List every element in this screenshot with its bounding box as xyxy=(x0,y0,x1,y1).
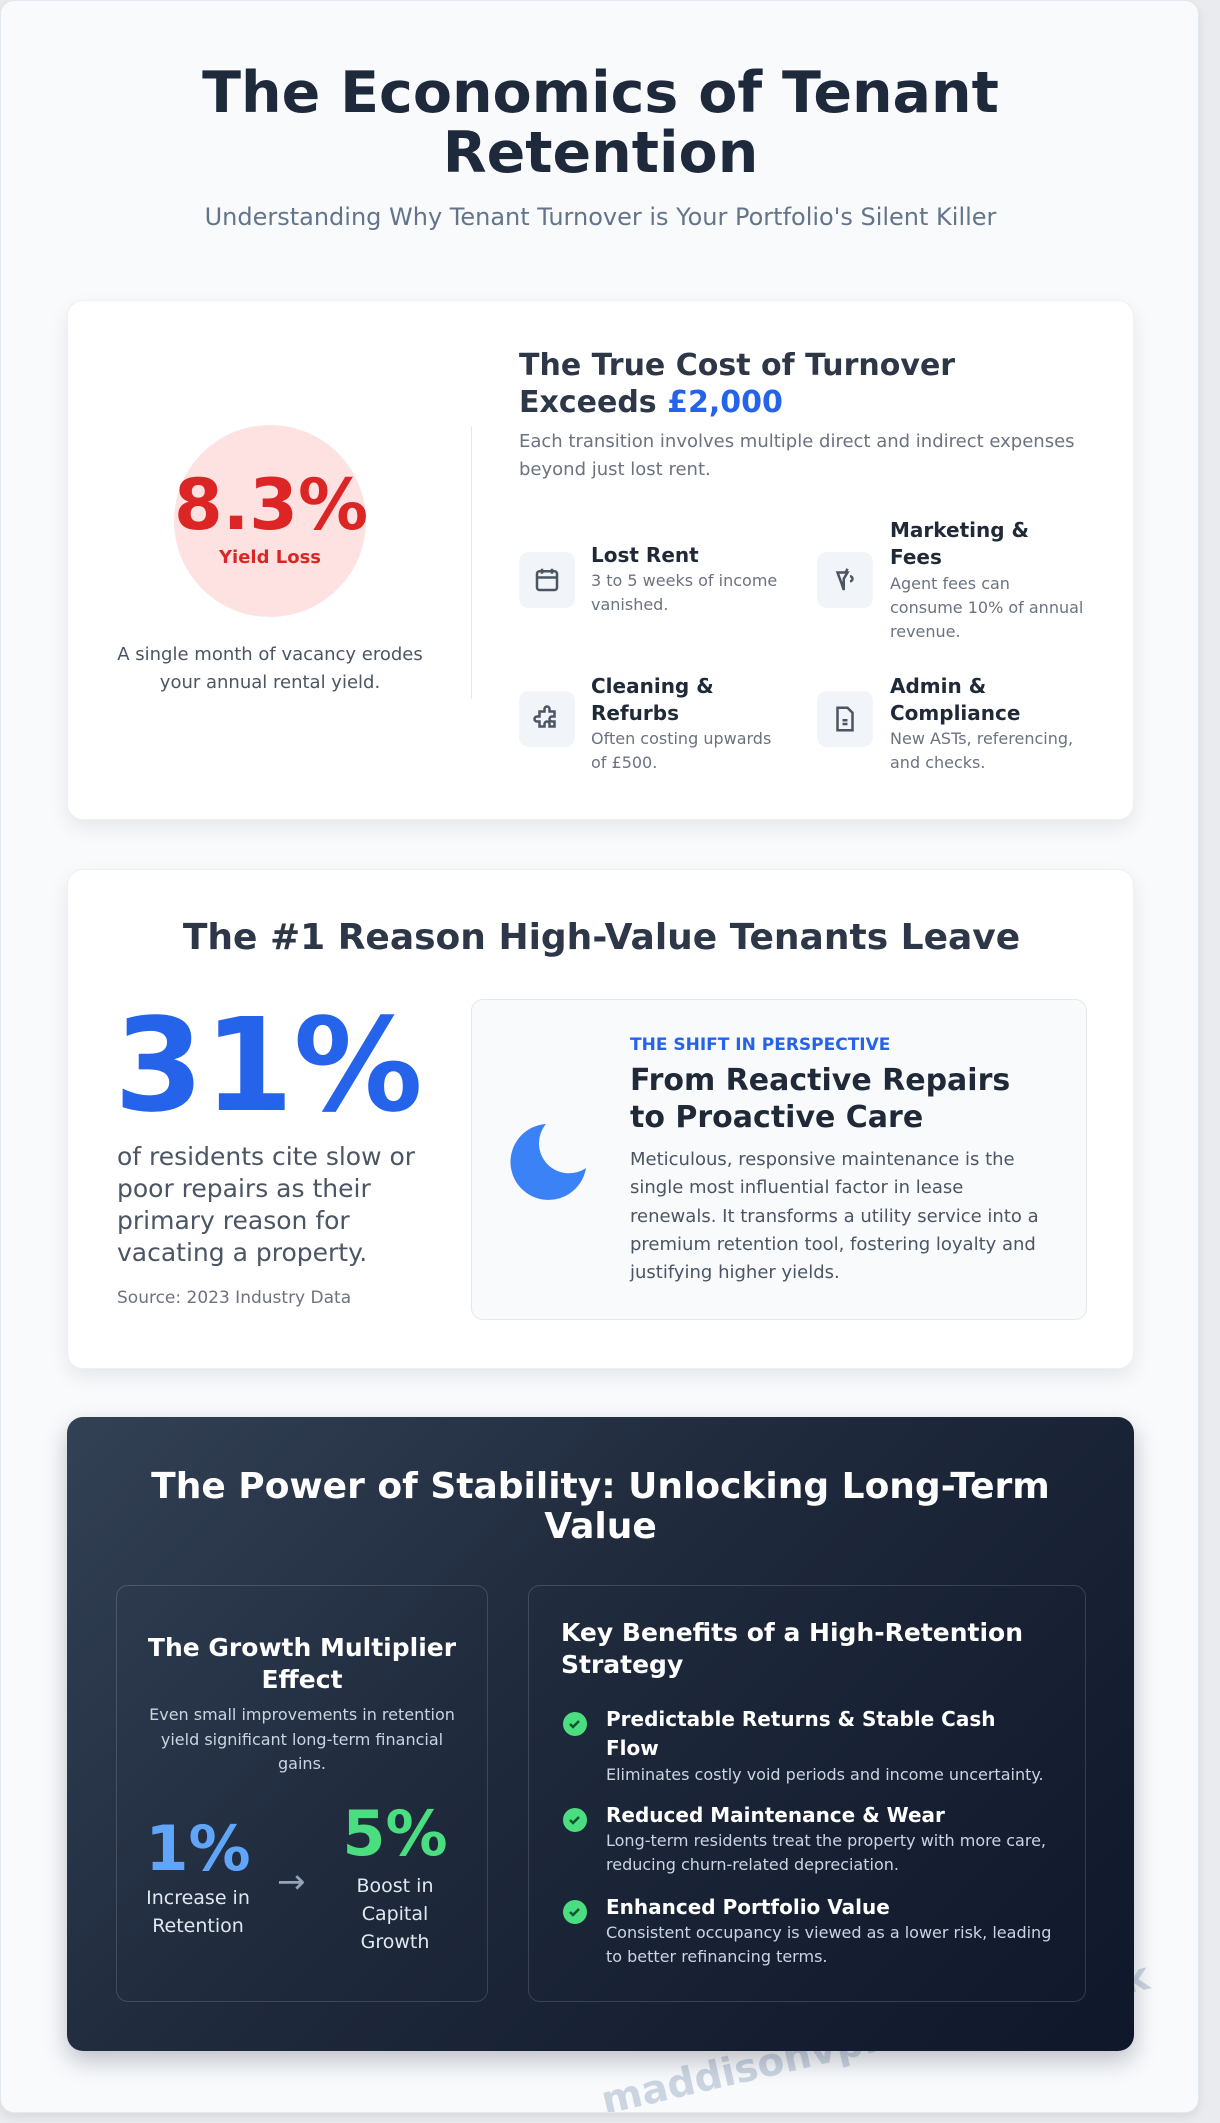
item: admin xyxy=(817,674,1073,772)
benefit 2: Long-term residents treat the property with more care, reducing churn-related depreciation. xyxy=(606,1831,1046,1874)
item: admin: Compliance xyxy=(890,701,1020,725)
benefits heading xyxy=(561,1618,1023,1679)
label: THE SHIFT IN PERSPECTIVE xyxy=(630,1035,890,1055)
heading: true cost: The True Cost of Turnover xyxy=(519,348,955,383)
arrow: → xyxy=(277,1862,306,1902)
panel: reason tenants leave xyxy=(67,869,1134,1369)
heading: Value xyxy=(544,1506,657,1547)
box title: Effect xyxy=(261,1665,343,1694)
stat 5%: Capital xyxy=(362,1903,428,1925)
heading: The Power of Stability: Unlocking Long-Term xyxy=(151,1466,1050,1507)
icon: moon xyxy=(510,1124,586,1200)
heading: true cost: Exceeds £2,000 xyxy=(519,385,783,420)
title: The Economics of Tenant xyxy=(202,60,999,126)
benefit 1: Eliminates costly void periods and income uncertainty. xyxy=(606,1765,1044,1784)
box title: The Growth Multiplier xyxy=(148,1633,456,1662)
title: Retention xyxy=(443,120,758,186)
title: to Proactive Care xyxy=(630,1100,923,1135)
yield loss circle: 8.3% xyxy=(174,464,368,546)
box desc: Even small improvements in retention yield significant long-term financial gains. xyxy=(149,1705,455,1773)
stat 1% xyxy=(145,1812,251,1937)
heading xyxy=(151,1466,1050,1547)
item: cleaning xyxy=(519,674,771,772)
item: marketing xyxy=(817,518,1083,641)
item: admin: Admin & xyxy=(890,674,986,698)
panel: true cost of turnover xyxy=(67,300,1134,820)
item: lost rent xyxy=(519,543,777,614)
shift box xyxy=(471,999,1087,1320)
item: marketing: Agent fees can consume 10% of annual revenue. xyxy=(890,574,1083,641)
benefit 2: Reduced Maintenance & Wear xyxy=(606,1803,945,1827)
benefit 1 xyxy=(563,1707,1044,1784)
stat 1%: 1% xyxy=(145,1812,251,1885)
stat text: of residents cite slow or poor repairs as their primary reason for vacating a property. xyxy=(117,1142,415,1267)
benefit 1: Predictable Returns & Stable Cash xyxy=(606,1707,995,1731)
paragraph: Meticulous, responsive maintenance is the single most influential factor in lease renewals. It transforms a utility service into a premium retention tool, fostering loyalty and justifying higher yields. xyxy=(630,1149,1039,1283)
panel: power of stability xyxy=(67,1417,1134,2051)
item: admin: New ASTs, referencing, and checks. xyxy=(890,729,1073,772)
box title xyxy=(148,1633,456,1694)
heading: The #1 Reason High-Value Tenants Leave xyxy=(183,917,1020,958)
benefit 3 xyxy=(563,1895,1051,1966)
stat 5% xyxy=(342,1797,448,1953)
item: cleaning: Cleaning & xyxy=(591,674,714,698)
title: From Reactive Repairs xyxy=(630,1063,1010,1098)
benefits heading: Strategy xyxy=(561,1650,683,1679)
key benefits box xyxy=(528,1585,1086,2002)
stat 5%: Growth xyxy=(361,1931,429,1953)
stat 1%: Retention xyxy=(152,1915,244,1937)
subtitle: Understanding Why Tenant Turnover is Your Portfolio's Silent Killer xyxy=(205,203,996,231)
benefit 3: Consistent occupancy is viewed as a lower risk, leading to better refinancing terms. xyxy=(606,1923,1051,1966)
yield loss circle: Yield Loss xyxy=(219,547,321,568)
benefits heading: Key Benefits of a High-Retention xyxy=(561,1618,1023,1647)
item: marketing: Marketing & xyxy=(890,518,1029,542)
title xyxy=(202,60,999,186)
benefit 2 xyxy=(563,1803,1046,1874)
growth multiplier box xyxy=(116,1585,488,2002)
description: Each transition involves multiple direct and indirect expenses beyond just lost rent. xyxy=(519,431,1075,480)
item: lost rent: Lost Rent xyxy=(591,543,699,567)
yield caption: A single month of vacancy erodes your annual rental yield. xyxy=(117,644,423,693)
stat 31%: 31% xyxy=(114,991,423,1141)
stat 5%: 5% xyxy=(342,1797,448,1870)
item: lost rent: 3 to 5 weeks of income vanished. xyxy=(591,571,777,614)
title xyxy=(630,1063,1010,1135)
item: marketing: Fees xyxy=(890,545,942,569)
item: cleaning: Refurbs xyxy=(591,701,679,725)
stat 5%: Boost in xyxy=(356,1875,434,1897)
source: Source: 2023 Industry Data xyxy=(117,1288,351,1308)
item: cleaning: Often costing upwards of £500. xyxy=(591,729,771,772)
benefit 1: Flow xyxy=(606,1736,659,1760)
benefit 3: Enhanced Portfolio Value xyxy=(606,1895,890,1919)
yield loss circle xyxy=(174,425,366,617)
stat 1%: Increase in xyxy=(146,1887,250,1909)
heading: true cost xyxy=(519,348,955,420)
